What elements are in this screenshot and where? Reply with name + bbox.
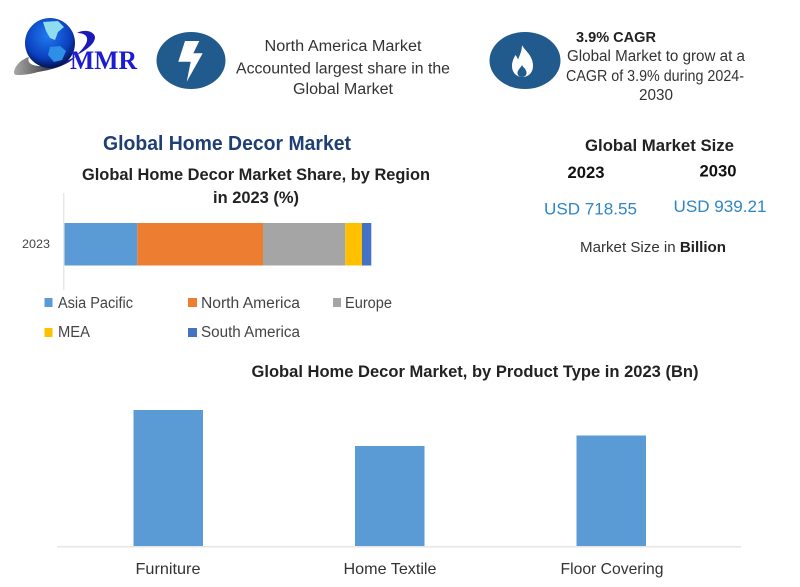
bar: Asia Pacific: [64, 223, 137, 266]
axis labels: Home Textile: [344, 561, 437, 578]
value: USD 939.21: USD 939.21: [674, 198, 766, 216]
logo: MMR globe: MMR: [70, 46, 137, 75]
label: 2030: 2030: [700, 162, 736, 180]
heading: stacked bar chart title: in 2023 (%): [213, 188, 299, 207]
stacked bar chart: 2023: [22, 237, 50, 251]
icon: lightning bolt: [156, 32, 226, 89]
axis labels: [136, 561, 664, 578]
bar: Europe: [263, 223, 345, 266]
bar: North America: [137, 223, 263, 266]
heading: stacked bar chart title: Global Home Decor Market Share, by Region: [82, 165, 430, 184]
note: market size in billion: Market Size in Billion: [580, 239, 726, 256]
bar: MEA: [345, 223, 362, 266]
heading: stacked bar chart title: [82, 165, 430, 207]
axis labels: Floor Covering: [560, 561, 664, 578]
text: CAGR callout: CAGR of 3.9% during 2024-: [566, 68, 744, 85]
text: CAGR callout: [566, 29, 745, 104]
heading: market size: Global Market Size: [585, 136, 734, 155]
bar: Home Textile: [355, 446, 424, 546]
text: CAGR callout: 2030: [639, 87, 673, 104]
chart legend: [44, 295, 392, 341]
heading: Global Home Decor Market: Global Home Decor Market: [103, 133, 351, 155]
axis labels: Furniture: [136, 561, 201, 578]
bar: South America: [362, 223, 371, 266]
heading: column chart title: Global Home Decor Market, by Product Type in 2023 (Bn): [252, 362, 698, 381]
chart legend: MEA: [58, 324, 91, 341]
icon: flame: [490, 32, 560, 89]
chart legend: Europe: [345, 295, 392, 312]
label: 2023: 2023: [568, 163, 604, 182]
logo: MMR globe: [14, 18, 137, 75]
text: CAGR callout: Global Market to grow at a: [567, 48, 745, 65]
column chart: [57, 410, 741, 578]
text: North America callout: Global Market: [293, 81, 394, 98]
bar: Floor Covering: [576, 436, 646, 546]
panel: Global Market Size: [544, 136, 766, 256]
text: North America callout: [236, 38, 450, 98]
bar: Furniture: [134, 410, 203, 546]
chart legend: South America: [201, 324, 300, 341]
text: CAGR callout: 3.9% CAGR: [576, 29, 656, 46]
value: USD 718.55: USD 718.55: [544, 200, 637, 218]
stacked bar chart: [22, 193, 371, 290]
text: North America callout: Accounted largest share in the: [236, 60, 450, 78]
chart legend: Asia Pacific: [58, 295, 133, 312]
chart legend: North America: [201, 295, 300, 312]
text: North America callout: North America Market: [264, 38, 422, 55]
